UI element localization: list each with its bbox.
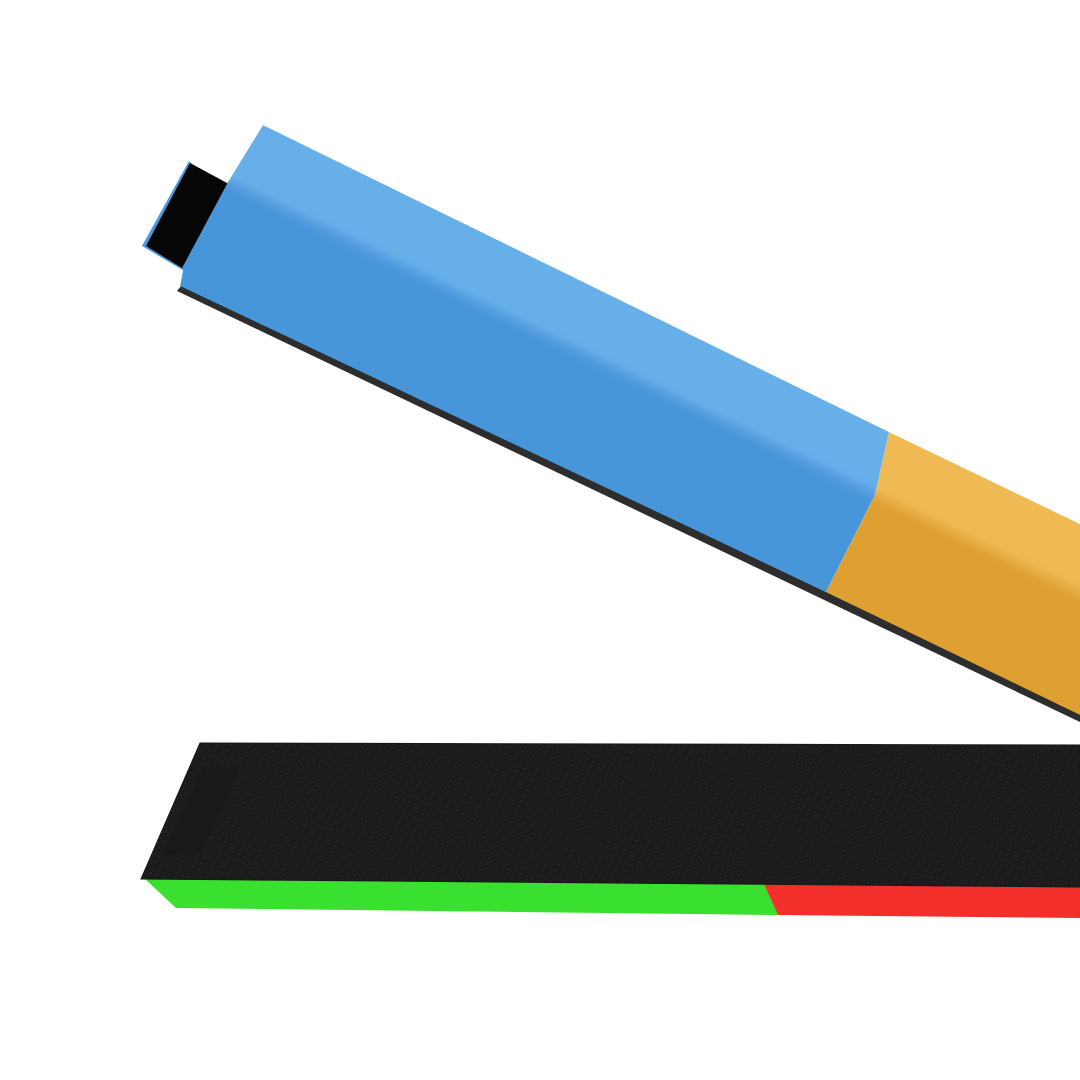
orange lower facet — [826, 495, 1080, 715]
tab black face — [146, 163, 240, 276]
small tab at strap end — [142, 161, 240, 276]
red edge segment — [763, 882, 1080, 918]
orange upper facet — [875, 432, 1080, 593]
blue lower facet — [180, 182, 875, 592]
black textured top face — [141, 743, 1080, 887]
blue upper facet — [228, 125, 889, 495]
blue segment — [180, 125, 889, 592]
tab blue edge — [142, 161, 192, 272]
dark underside strip of upper strap — [177, 285, 1080, 722]
green edge segment — [144, 878, 778, 915]
orange segment — [826, 432, 1080, 715]
lower strap: black top with green and red edge — [141, 743, 1080, 918]
orange crease shading — [875, 495, 1080, 596]
fastener patch at strap end — [162, 767, 240, 855]
blue crease shading — [228, 182, 875, 495]
illustration: two colour-blocked straps — [140, 125, 1080, 918]
upper strap: angled blue and orange band — [142, 125, 1080, 722]
